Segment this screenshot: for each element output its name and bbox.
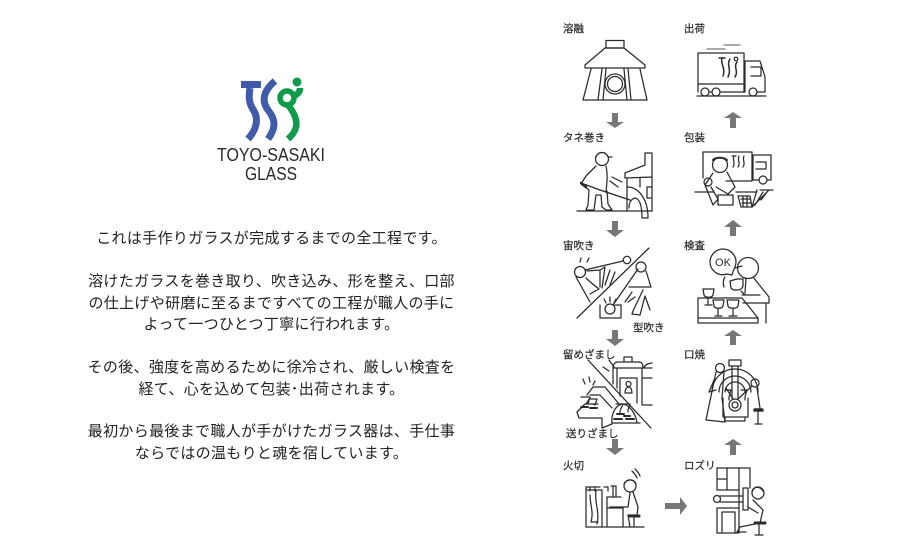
icon: fire polishing (706, 360, 762, 424)
label: transfer annealing: 送りざまし (566, 427, 618, 440)
label: shipping: 出荷 (684, 23, 705, 35)
arrow: up 3 (724, 220, 742, 236)
icon: inspection OK: OK (715, 257, 732, 269)
text: closing: ならではの温もりと魂を宿しています。 (135, 444, 408, 462)
arrow: up 2 (724, 330, 742, 345)
label: mold blowing: 型吹き (633, 321, 664, 334)
label: fire polishing: 口焼 (684, 349, 705, 361)
arrow: down 2 (606, 221, 624, 237)
text: process description (88, 273, 455, 333)
label: fire cutting: 火切 (563, 460, 584, 472)
icon: fire cutting worker (586, 469, 644, 527)
text: cooling and inspection: 経て、心を込めて包装･出荷されます。 (138, 380, 404, 398)
text: closing (88, 423, 455, 462)
label: retention annealing: 留めざまし (563, 348, 616, 361)
icon: annealing furnace (577, 357, 652, 428)
text: process description: よって一つひとつ丁寧に行われます。 (144, 316, 399, 333)
icon: inspection OK (698, 249, 769, 323)
icon: packing worker (695, 152, 773, 207)
text: cooling and inspection: その後、強度を高めるために徐冷され、厳しい検査を (88, 359, 455, 376)
text: process description: 溶けたガラスを巻き取り、吹き込み、形を整え、口部 (88, 273, 455, 290)
arrow: down 1 (606, 113, 624, 128)
arrow: right (665, 497, 687, 515)
label: packing: 包装 (684, 131, 705, 144)
text: cooling and inspection (88, 359, 455, 398)
label: gathering: タネ巻き (563, 132, 605, 144)
logo: TOYO-SASAKI (217, 145, 325, 165)
label: grinding: ロズリ (684, 459, 716, 472)
icon: gathering worker (577, 152, 652, 218)
label: melting: 溶融 (563, 23, 584, 35)
logo: GLASS (245, 164, 297, 184)
label: free blowing: 宙吹き (563, 239, 594, 252)
text: process description: の仕上げや研磨に至るまですべての工程が職人の手に (88, 294, 455, 312)
icon: grinding worker (714, 468, 765, 535)
arrow: down 3 (606, 330, 624, 346)
icon: truck (697, 45, 766, 96)
arrow: up 4 (724, 112, 742, 128)
text: intro: これは手作りガラスが完成するまでの全工程です。 (96, 230, 447, 247)
text: closing: 最初から最後まで職人が手がけたガラス器は、手仕事 (88, 423, 455, 440)
logo (217, 78, 325, 184)
icon: furnace (583, 40, 647, 100)
arrow: up 1 (724, 439, 742, 455)
arrow: down 4 (606, 439, 624, 455)
label: inspection: 検査 (684, 239, 705, 252)
icon: blowing (574, 248, 651, 318)
